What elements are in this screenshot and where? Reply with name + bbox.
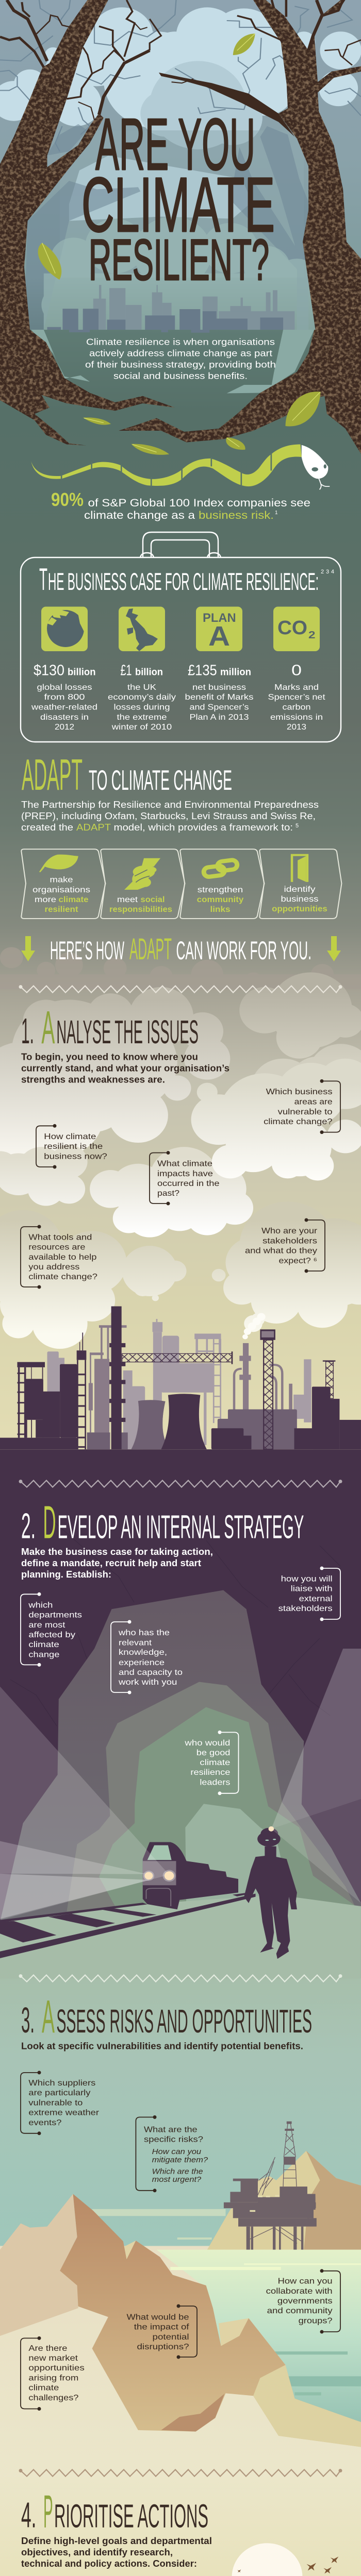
question: relevant knowledge: relevant xyxy=(119,1638,152,1648)
stat: 135 million: and Spencer’s xyxy=(190,703,249,712)
background branch lines xyxy=(0,0,361,151)
question: stakeholders: Who are your xyxy=(261,1227,318,1235)
question: relevant knowledge: knowledge, xyxy=(119,1648,167,1657)
teal inner haze xyxy=(41,216,322,332)
text: PREP paragraph xyxy=(21,800,319,833)
leaf: top right xyxy=(233,33,255,55)
foreground mountains xyxy=(60,2194,361,2447)
stat: 1 billion: winter of 2010 xyxy=(111,723,172,732)
lattice crane and towers xyxy=(122,1331,335,1449)
text: step 4 intro: objectives, and identify research, xyxy=(21,2547,173,2557)
question: stakeholders xyxy=(245,1218,325,1273)
intro text: actively address climate change as part xyxy=(89,348,272,358)
stat: zero emissions: Spencer’s net xyxy=(268,693,325,702)
question: climate impacts: impacts have xyxy=(157,1170,213,1178)
chevron: community links: strengthen xyxy=(198,886,243,894)
heading: step 3 assess xyxy=(21,1991,312,2043)
headlamps xyxy=(143,1826,274,1882)
stat: 1 billion: £1 xyxy=(121,663,132,679)
stat: 135 million: net business xyxy=(192,683,246,692)
question: tools and resources: resources are xyxy=(28,1243,86,1252)
heading: here's how ADAPT works: HERE’S HOW xyxy=(50,936,124,965)
heading: business case: T xyxy=(39,562,47,597)
question: suppliers xyxy=(21,2071,100,2135)
leaf: branch right large xyxy=(286,392,320,427)
icon: Plan A: A xyxy=(208,621,230,652)
question: which business areas: Which business xyxy=(266,1088,333,1096)
question: climate impacts: occurred in the xyxy=(157,1179,220,1188)
icon: globe xyxy=(41,607,88,651)
question: tools and resources: available to help xyxy=(28,1253,97,1262)
question: market opportunities xyxy=(21,2336,85,2411)
text: step 4 intro xyxy=(21,2536,212,2569)
scene: sea, mountains and oil rig xyxy=(0,2122,361,2447)
question: departments: which xyxy=(28,1601,53,1609)
question: departments: climate xyxy=(28,1640,59,1649)
light beams xyxy=(0,1649,361,1920)
stat: 90 percent business risk: 1 xyxy=(275,510,278,516)
heading: here's how ADAPT works: ADAPT xyxy=(129,933,172,966)
intro text: Climate resilience is when organisations xyxy=(86,336,275,347)
back layer xyxy=(47,1319,311,1449)
background tree silhouettes xyxy=(24,124,308,330)
question: collaborate: and community xyxy=(267,2307,333,2315)
question: climate impacts xyxy=(150,1151,220,1206)
icon: train xyxy=(143,1842,238,1909)
scene: mine tunnel xyxy=(0,1590,361,1978)
question: market opportunities: opportunities xyxy=(28,2364,85,2372)
stat: 130 billion: 2012 xyxy=(55,723,74,732)
question: relevant knowledge: who has the xyxy=(118,1629,170,1637)
question: climate impacts: past? xyxy=(157,1189,179,1198)
question: departments: change xyxy=(28,1650,60,1659)
text: step 1 intro xyxy=(21,1052,229,1085)
chevron: community links: community xyxy=(197,895,243,904)
rock cracks xyxy=(10,1520,340,1726)
question: specific risks: What are the xyxy=(144,2125,198,2134)
light teal rim shapes xyxy=(31,330,90,382)
heading: step 3 assess: 3. xyxy=(21,2000,35,2040)
machinery block xyxy=(87,1400,297,1449)
chevron: social responsibilities: meet xyxy=(117,895,138,904)
stat: 135 million: Plan A in 2013 xyxy=(190,713,249,722)
text: step 4 intro: Define high-level goals and departmental xyxy=(21,2536,212,2546)
question: collaborate: groups? xyxy=(299,2316,333,2325)
chevron: climate resilient xyxy=(21,849,105,919)
text: PREP paragraph: model, which provides a framework to: xyxy=(113,822,293,833)
icon: Plan A xyxy=(196,607,242,652)
text: step 4 intro: technical and policy actions. Consider: xyxy=(21,2558,197,2569)
question: resilience leaders: leaders xyxy=(200,1778,230,1787)
question: disruptions: potential xyxy=(153,2333,189,2342)
text: PREP paragraph: 5 xyxy=(296,823,299,829)
question: which business areas: vulnerable to xyxy=(278,1108,333,1116)
question: market opportunities: Are there xyxy=(28,2344,68,2353)
heading: step 4 prioritise xyxy=(21,2486,208,2538)
icon: chain xyxy=(203,859,238,877)
stat: 90 percent business risk xyxy=(51,489,310,521)
scene: industrial skyline xyxy=(0,1307,361,1449)
heading: step 2 develop: 2. xyxy=(21,1506,36,1546)
text: PREP paragraph: The Partnership for Resilience and Environmental Preparedness xyxy=(21,800,319,810)
question: specific risks: Which are the xyxy=(152,2167,203,2176)
heading: step 1 analyse xyxy=(21,1002,199,1054)
clouds: lower pale band xyxy=(69,156,252,221)
question: resilience leaders: resilience xyxy=(190,1768,231,1777)
icon: sun xyxy=(232,2543,302,2576)
stat: 135 million: £135 xyxy=(188,663,217,679)
question: resilience leaders: who would xyxy=(184,1739,230,1748)
question: collaborate: collaborate with xyxy=(266,2287,333,2296)
intro text xyxy=(85,336,276,381)
stat: zero emissions: Marks and xyxy=(274,683,319,692)
question: which business areas: areas are xyxy=(294,1098,333,1107)
question: external stakeholders xyxy=(278,1566,340,1621)
question: disruptions: the impact of xyxy=(134,2323,189,2332)
text: PREP paragraph: ADAPT xyxy=(76,822,111,833)
stat: zero emissions: 0 xyxy=(291,663,302,679)
stat: 130 billion: billion xyxy=(68,667,96,678)
question: how climate resilient: business now? xyxy=(44,1152,107,1161)
stat: 1 billion xyxy=(108,663,176,732)
stat: 130 billion: disasters in xyxy=(40,713,89,722)
leaf: falling small xyxy=(83,417,111,425)
arrow: left xyxy=(21,936,35,961)
question: market opportunities: climate xyxy=(28,2384,59,2393)
stat: 130 billion: global losses xyxy=(37,683,92,692)
calm sea xyxy=(157,2250,361,2423)
chevron: climate resilient: make xyxy=(50,876,73,885)
dark foreground xyxy=(0,1307,361,1449)
question: relevant knowledge xyxy=(111,1620,183,1694)
question: which business areas: climate change? xyxy=(264,1117,333,1126)
stat: 1 billion: economy’s daily xyxy=(108,693,176,702)
question: specific risks: most urgent? xyxy=(152,2175,202,2184)
question: tools and resources: climate change? xyxy=(28,1273,97,1281)
heading: step 3 assess: A xyxy=(42,1991,55,2043)
question: market opportunities: arising from xyxy=(28,2374,78,2382)
heading: step 1 analyse: 1. xyxy=(21,1011,34,1051)
question: departments: departments xyxy=(28,1611,82,1620)
tunnel layer 4 xyxy=(185,1804,299,1922)
leaf: lower left xyxy=(38,243,61,280)
heading: ADAPT to climate change: ADAPT xyxy=(22,751,83,800)
question: suppliers: vulnerable to xyxy=(28,2099,83,2107)
question: how climate resilient xyxy=(36,1124,107,1168)
stat: 130 billion xyxy=(31,663,97,732)
stat: 1 billion: billion xyxy=(135,667,163,678)
question: suppliers: events? xyxy=(28,2119,62,2127)
chevron: community links xyxy=(180,849,264,919)
stat: 130 billion: weather-related xyxy=(31,703,97,712)
question: external stakeholders: stakeholders xyxy=(278,1604,333,1613)
panel: ADAPT framework chevrons xyxy=(21,849,341,919)
leaf: falling right xyxy=(226,437,245,450)
chevron: social responsibilities: responsibilities xyxy=(109,905,172,914)
stat: 90 percent business risk: of S&P Global 100 Index companies see xyxy=(88,497,310,509)
stat: zero emissions: 2013 xyxy=(287,723,306,732)
question: climate impacts: What climate xyxy=(157,1160,212,1168)
heading: ADAPT to climate change xyxy=(22,751,232,800)
suitcase outline xyxy=(21,532,341,742)
left tree xyxy=(0,0,175,446)
question: relevant knowledge: work with you xyxy=(118,1678,177,1687)
intro text: of their business strategy, providing both xyxy=(85,360,276,370)
question: external stakeholders: how you will xyxy=(281,1574,333,1583)
scene: stormy sky and bare trees xyxy=(0,0,361,455)
stat: 135 million: million xyxy=(220,667,251,678)
icon: miner xyxy=(244,1828,297,1959)
chevron: climate resilient: climate xyxy=(59,895,89,904)
oil rig xyxy=(224,2122,317,2250)
question: disruptions xyxy=(127,2304,197,2359)
stat: 130 billion: $130 xyxy=(34,663,64,679)
question: departments xyxy=(21,1592,82,1667)
stat: 130 billion: from 800 xyxy=(44,693,85,702)
clouds: mid layer xyxy=(140,61,262,149)
heading: business case: 2 3 4 xyxy=(321,569,334,575)
question: market opportunities: new market xyxy=(28,2354,78,2363)
stat: zero emissions: emissions in xyxy=(270,713,323,722)
mid layer xyxy=(87,1325,251,1449)
tunnel layer 1 xyxy=(0,1590,361,1922)
leaf: falling centre xyxy=(131,444,169,455)
chevron: business opportunities: opportunities xyxy=(272,905,327,913)
chevron: community links: links xyxy=(210,905,231,914)
stat: 135 million xyxy=(185,663,254,722)
question: stakeholders: stakeholders xyxy=(262,1236,317,1246)
question: how climate resilient: resilient is the xyxy=(44,1142,103,1151)
icon: UK map xyxy=(119,607,165,651)
tunnel layer 2 xyxy=(67,1682,354,1922)
stat: 90 percent business risk: business risk. xyxy=(199,510,274,521)
chevron: business opportunities: business xyxy=(281,895,319,904)
sea highlights xyxy=(92,2209,361,2395)
question: specific risks: mitigate them? xyxy=(152,2156,208,2164)
chevron: climate resilient: organisations xyxy=(32,886,90,894)
question: which business areas xyxy=(264,1079,340,1134)
tunnel floor xyxy=(0,1895,361,1978)
text: step 3 intro: Look at specific vulnerabilities and identify potential benefits. xyxy=(21,2041,303,2052)
text: step 2 intro: Make the business case for taking action, xyxy=(21,1547,213,1557)
icon: leaf xyxy=(39,855,78,872)
right tree xyxy=(119,0,361,454)
question: suppliers: extreme weather xyxy=(28,2109,100,2117)
chevron: social responsibilities: social xyxy=(140,895,165,904)
clouds: pale sky xyxy=(0,7,361,128)
heading: step 4 prioritise: P xyxy=(43,2486,53,2538)
question: departments: are most xyxy=(28,1621,65,1630)
chevron: social responsibilities xyxy=(101,849,185,919)
rails xyxy=(0,1892,256,1958)
question: stakeholders: expect? ⁶ xyxy=(278,1257,317,1265)
stat: zero emissions: carbon xyxy=(283,703,310,712)
question: how climate resilient: How climate xyxy=(44,1132,96,1141)
question: specific risks xyxy=(136,2115,208,2192)
question: market opportunities: challenges? xyxy=(28,2394,79,2402)
heading: here's how ADAPT works xyxy=(50,933,311,966)
question: collaborate: governments xyxy=(277,2297,333,2306)
heading: step 4 prioritise: 4. xyxy=(21,2495,36,2535)
icon: CO2 xyxy=(273,607,320,651)
stat: 1 billion: losses during xyxy=(113,703,170,712)
question: relevant knowledge: experience xyxy=(119,1658,165,1667)
question: tools and resources: you address xyxy=(28,1263,79,1272)
text: step 1 intro: To begin, you need to know where you xyxy=(21,1052,198,1062)
chevron: climate resilient: resilient xyxy=(44,905,78,914)
text: step 2 intro xyxy=(21,1547,213,1580)
question: tools and resources xyxy=(21,1225,97,1289)
question: resilience leaders: be good xyxy=(196,1749,230,1757)
question: collaborate xyxy=(266,2269,340,2334)
heading: step 1 analyse: A xyxy=(41,1002,55,1054)
icon: CO2: CO xyxy=(277,617,307,639)
icon: handshake xyxy=(124,858,160,890)
intro text: social and business benefits. xyxy=(113,371,248,381)
flock of birds xyxy=(122,2556,338,2576)
icon: Plan A: PLAN xyxy=(203,611,236,625)
text: PREP paragraph: (PREP), including Oxfam, Starbucks, Levi Strauss and Swiss Re, xyxy=(21,811,316,821)
question: external stakeholders: liaise with xyxy=(291,1585,333,1594)
stat: 90 percent business risk: 90% xyxy=(51,489,84,510)
question: suppliers: Which suppliers xyxy=(28,2079,95,2088)
question: specific risks: How can you xyxy=(152,2147,202,2156)
heading: step 2 develop: D xyxy=(43,1497,56,1549)
stat: 1 billion: the extreme xyxy=(117,713,167,722)
question: collaborate: How can you xyxy=(278,2277,333,2286)
skyline xyxy=(47,285,294,333)
smoke xyxy=(242,1313,266,1340)
chevron: climate resilient: more xyxy=(35,895,56,904)
question: external stakeholders: external xyxy=(299,1595,333,1603)
question: suppliers: are particularly xyxy=(28,2089,90,2097)
question: specific risks: specific risks? xyxy=(144,2136,203,2144)
icon: snake xyxy=(31,444,330,489)
question: tools and resources: What tools and xyxy=(28,1233,92,1242)
question: resilience leaders: climate xyxy=(200,1758,231,1767)
text: PREP paragraph: created the xyxy=(21,822,73,833)
question: departments: affected by xyxy=(28,1631,75,1639)
icon: CO2: 2 xyxy=(308,630,316,641)
question: relevant knowledge: and capacity to xyxy=(119,1668,183,1677)
distant mountain xyxy=(207,2151,361,2250)
text: step 1 intro: currently stand, and what your organisation’s xyxy=(21,1063,229,1074)
tunnel layer 3 xyxy=(99,1707,354,1922)
text: step 2 intro: planning. Establish: xyxy=(21,1569,111,1580)
stat: 135 million: benefit of Marks xyxy=(185,693,254,702)
question: stakeholders: and what do they xyxy=(245,1247,317,1256)
chevron: business opportunities xyxy=(259,849,341,919)
arrow: right xyxy=(327,936,341,961)
stat: zero emissions xyxy=(268,663,325,732)
question: disruptions: What would be xyxy=(127,2313,189,2321)
text: step 1 intro: strengths and weaknesses are. xyxy=(21,1075,165,1085)
question: resilience leaders xyxy=(184,1731,238,1795)
text: step 2 intro: define a mandate, recruit help and start xyxy=(21,1558,201,1568)
panel: business case suitcase xyxy=(21,532,341,742)
chevron: business opportunities: identify xyxy=(284,885,316,894)
leaves xyxy=(38,33,320,455)
stat: 90 percent business risk: climate change as a xyxy=(84,510,195,521)
title xyxy=(81,104,275,292)
heading: step 2 develop xyxy=(21,1497,304,1549)
icon: door xyxy=(291,854,308,882)
clouds: analyse section sky xyxy=(0,947,361,1349)
question: disruptions: disruptions? xyxy=(137,2343,189,2351)
stat: 1 billion: the UK xyxy=(127,683,156,692)
